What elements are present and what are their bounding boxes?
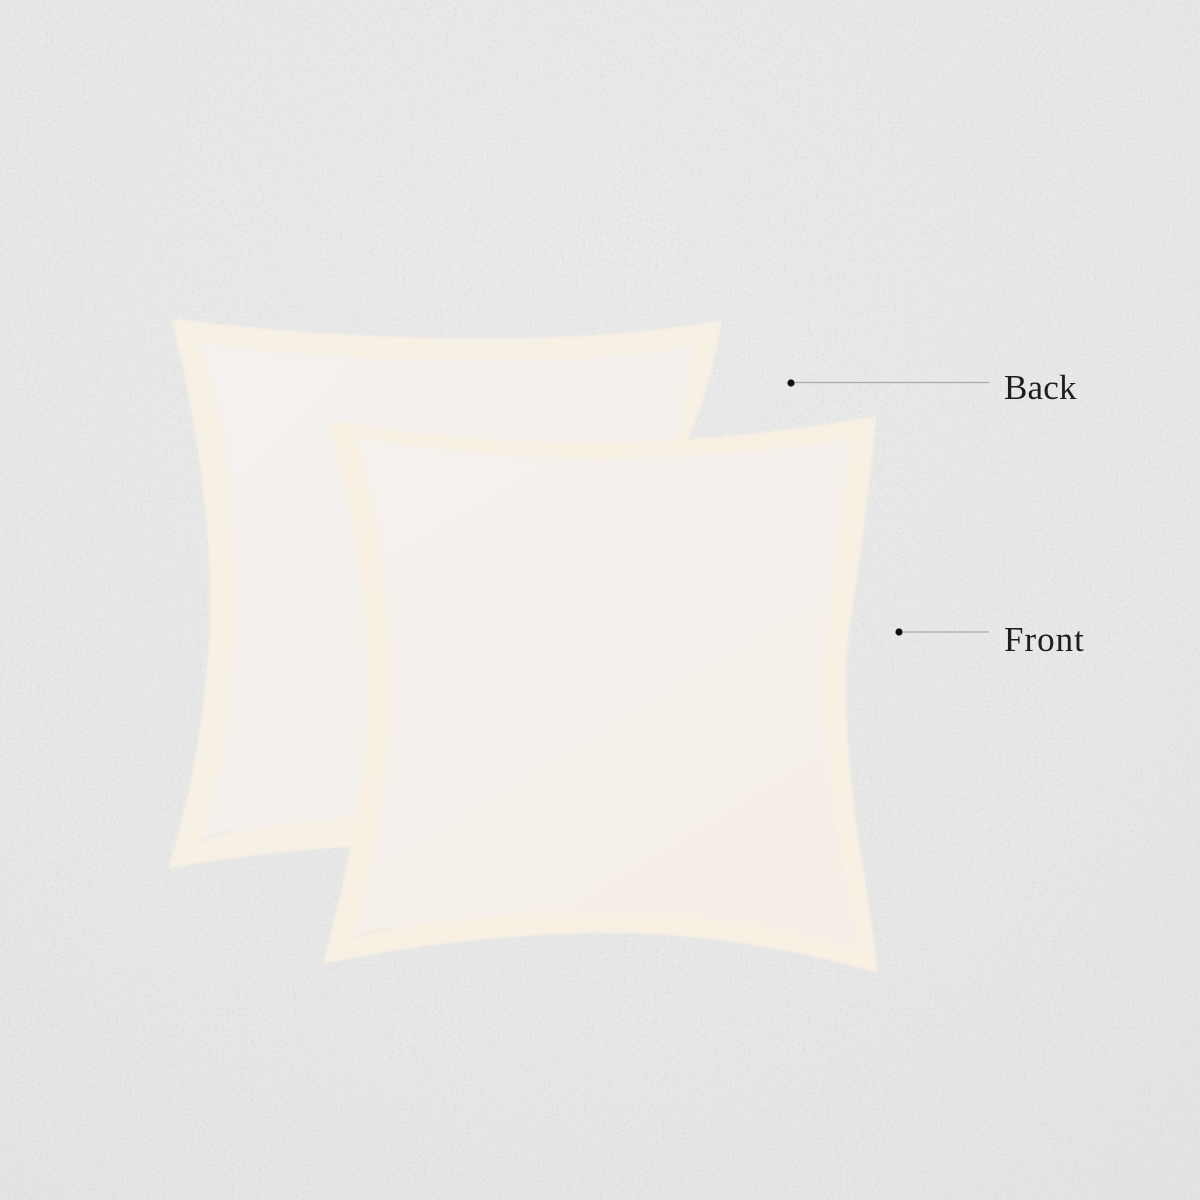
label: Front: Front [1004,620,1085,659]
callout dot: Back [787,379,795,387]
callout dot: Front [895,628,903,636]
front pillow [323,416,878,973]
back pillow flange [168,319,722,869]
callout: Front [895,620,1085,659]
back pillow lower-corner seam [200,831,230,842]
front pillow lower-corner seam [355,928,392,937]
callout line: Back [795,382,989,384]
front pillow flange [323,416,878,973]
label: Back: Back [1004,368,1077,407]
front pillow centre panel [355,437,860,950]
back pillow centre panel [200,343,696,842]
callout line: Front [903,631,989,633]
callout: Back [787,368,1077,407]
back pillow [168,319,722,869]
